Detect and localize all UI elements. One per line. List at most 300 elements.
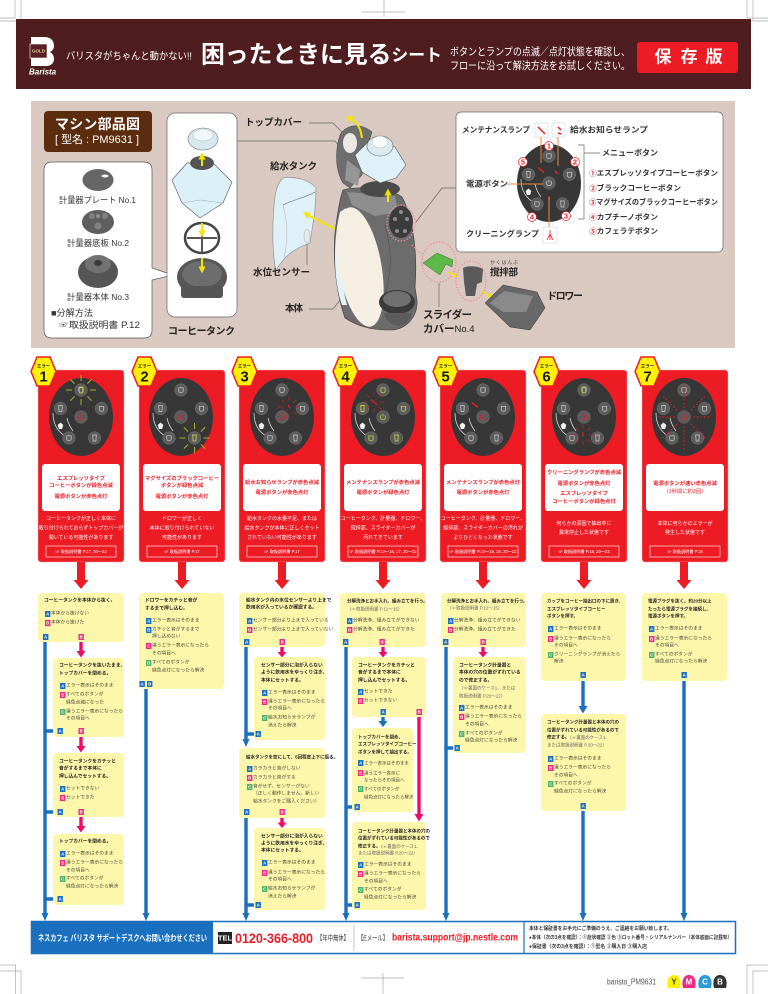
step: clean and assemble: 分解洗浄とお手入れ、組み立てを行う。 <box>347 598 428 604</box>
step: clean and assemble: B <box>348 628 351 632</box>
phone number: 【年中無休】 <box>317 932 349 942</box>
step: clean and assemble: 分解洗浄、組み立てができた <box>454 626 516 632</box>
step: close cover: A <box>59 896 62 902</box>
flow column 7 <box>642 593 727 921</box>
warranty note: ●本体（次の3点を確認）：①症状確認 ②色 ③ロット番号・シリアルナンバー（本体底面に記載有） <box>529 934 732 941</box>
step: unplug: C <box>650 652 653 658</box>
step: clean and assemble: 分解洗浄とお手入れ、組み立てを行う。 <box>447 598 528 604</box>
label: drawer: ドロワー <box>547 290 583 302</box>
error 7 status box: 電源ボタンが速い赤色点滅 <box>653 479 717 487</box>
label: main body: 本体 <box>285 302 303 314</box>
step: refill water: B <box>263 870 266 876</box>
error 7 status box <box>646 464 724 511</box>
error 7 badge <box>635 357 660 386</box>
error card 3 <box>232 357 325 562</box>
error 1 cause: 開いている可能性があります <box>49 534 113 541</box>
error 2 status box: ボタンが緑色点滅 <box>161 481 204 489</box>
step: clean and assemble: 分解洗浄、組み立てができた <box>353 626 415 632</box>
tagline: バリスタがちゃんと動かない!! <box>66 50 192 62</box>
step: correct alignment: コーヒータンク計量器と本体の穴の <box>547 718 619 726</box>
step: correct alignment: C <box>460 732 463 736</box>
step: correct alignment: コーヒータンク計量器と <box>459 662 512 668</box>
flow column 5 <box>441 593 528 921</box>
document code: barista_PM9631 <box>607 978 656 986</box>
error 1 dial <box>49 375 113 456</box>
error 2 status box: マグサイズのブラックコーヒー <box>145 474 219 482</box>
step: correct alignment: C <box>549 782 552 786</box>
error 7 cause: 本体に何らかのエラーが <box>657 520 713 527</box>
error 5 reference <box>448 546 518 557</box>
error 1 cause: 取り付けられておらずトップカバーが <box>39 524 123 532</box>
step: push drawer: するまで押し込む。 <box>145 604 188 612</box>
step: push drawer: カチッと音がするまで <box>152 626 200 632</box>
step: close top cover: 違うエラー表示になったら <box>66 708 123 714</box>
button numbers: 1 <box>547 142 551 150</box>
step: remove tank <box>38 593 124 642</box>
step: set tank: B <box>359 698 362 704</box>
step: reinsert tank: B <box>80 810 83 814</box>
flow column 4 <box>340 593 430 921</box>
error 4 status box <box>344 464 422 511</box>
error 7 cause <box>657 520 713 536</box>
logo: Barista: Barista <box>29 68 57 76</box>
step: brew espresso <box>352 728 417 812</box>
step: shake tank: A <box>248 766 251 772</box>
step: fill water: 本体にセットする。 <box>261 676 304 684</box>
error 5 status box: 電源ボタンが赤色点灯 <box>457 488 510 496</box>
error 3 status box: 電源ボタンが赤色点灯 <box>256 488 309 496</box>
label: menu button: メニューボタン <box>602 148 658 158</box>
step: clean and assemble: （☞取扱説明書 P.12〜15） <box>347 606 402 612</box>
error 2 cause <box>150 515 214 541</box>
arrow: error 5 <box>476 562 490 589</box>
step: shake tank: A <box>245 810 248 814</box>
step: check water level: センサー部分より上まで入っている <box>253 616 329 624</box>
base plate No.2: 計量器底板 No.2 <box>67 238 129 248</box>
footer: support desk <box>31 921 736 954</box>
error 6 badge: 6 <box>542 368 551 386</box>
step: clean and assemble: B <box>381 640 384 644</box>
label: power button: 電源ボタン <box>466 178 508 188</box>
error 5 status box: メンテナンスランプが赤色点灯 <box>446 478 521 486</box>
instruction text <box>450 45 630 72</box>
step: unplug: たったら電源プラグを接続し、 <box>648 606 711 612</box>
step: brew espresso: エスプレッソタイプコーヒー <box>358 740 417 748</box>
base plate No.2 <box>67 210 129 248</box>
error 3 badge: エラー <box>238 364 252 370</box>
keep badge: 保 <box>654 48 672 66</box>
instruction text: フローに沿って解決方法をお試しください。 <box>450 59 630 72</box>
step: remove tank: A <box>44 634 47 640</box>
step: shake tank: 給水タンクを空にして、5回程度上下に振る。 <box>246 754 338 760</box>
step: set tank: A <box>382 710 385 714</box>
error 6 cause <box>556 520 612 536</box>
error 7 reference: ☞ 取扱説明書 P.18 <box>667 548 703 555</box>
step: correct alignment: 緑色点灯になったら解決 <box>554 788 607 794</box>
step: unplug: 違うエラー表示になったら <box>655 634 712 642</box>
error 7 status box: （1秒間に約3回） <box>664 487 706 495</box>
step: check water level: 飲用水が入っているか確認する。 <box>246 604 317 610</box>
control dial <box>517 144 581 222</box>
step: close top cover: その項目へ <box>66 714 90 722</box>
step: push drawer: B <box>148 682 151 686</box>
header band <box>16 19 751 89</box>
error 5 cause: 撹拌部、スライダーカバーの汚れが <box>443 524 523 532</box>
menu button list: ⑤カフェラテボタン <box>589 226 659 236</box>
support label <box>31 921 213 954</box>
step: brew espresso: ボタンを押して抽出する。 <box>358 748 412 756</box>
slider cover illustration <box>412 242 456 307</box>
step: correct alignment: A <box>359 862 362 868</box>
warranty note: ●保証書（次の3点を確認）：①型名 ②購入日 ③購入店 <box>529 943 647 950</box>
step: push drawer: A <box>147 618 150 624</box>
phone number <box>218 930 349 946</box>
error 5 badge <box>433 357 458 386</box>
phone number: TEL <box>218 934 232 942</box>
blue path column 2 <box>142 689 150 921</box>
step: close top cover <box>53 658 125 737</box>
step: check water level: B <box>248 628 251 632</box>
error 4 cause: コーヒータンク、計量器、ドロワー、 <box>341 515 425 522</box>
panel: control panel key <box>416 112 723 252</box>
error 2 cause: ドロワーが正しく <box>162 515 202 522</box>
label: water tank: 給水タンク <box>270 160 317 172</box>
step: remove tank: 本体から抜けた <box>51 618 85 626</box>
icon: cleaning lamp <box>543 227 557 243</box>
step: close top cover: B <box>61 692 64 698</box>
label: slider cover No.4: スライダー <box>423 308 472 321</box>
drawer illustration <box>485 285 545 330</box>
step: brew espresso: なったらその項目へ <box>364 776 405 784</box>
menu button list: ③マグサイズのブラックコーヒーボタン <box>589 196 718 206</box>
step: brew with cup: C <box>549 652 552 658</box>
step: brew with cup: エラー表示はそのまま <box>554 624 602 632</box>
error 1 badge: エラー <box>37 364 51 370</box>
button numbers: 4 <box>530 212 535 222</box>
step: brew with cup: カップをコーヒー抽出口の下に置き、 <box>547 598 623 604</box>
error 6 status box <box>545 464 623 511</box>
step: refill water: センサー部分に泡が入らない <box>261 832 323 840</box>
step: clean and assemble <box>441 593 528 647</box>
step: correct alignment: コーヒータンク計量器と本体の穴の <box>358 828 430 834</box>
error 7 badge: 7 <box>643 368 652 386</box>
error 7 reference <box>650 546 720 557</box>
error card 2 <box>132 357 225 562</box>
step: close cover: B <box>61 860 64 866</box>
keep badge: 版 <box>706 48 722 66</box>
error 3 reference: ☞ 取扱説明書 P.17 <box>264 548 300 555</box>
leader lines <box>237 123 360 309</box>
step: push drawer: ドロワーをカチッと音が <box>145 596 198 604</box>
step: fill water: その項目へ <box>268 704 292 712</box>
error 5 cause: よりひどくなった状態です <box>453 534 513 541</box>
parts title <box>44 111 152 152</box>
step: brew espresso: すべてのボタンが <box>364 786 400 792</box>
step: brew with cup: A <box>582 672 585 678</box>
error 2 reference: ☞ 取扱説明書 P.17 <box>164 548 200 555</box>
step: reinsert tank: 押し込んでセットする。 <box>59 772 111 780</box>
step: push drawer: その項目へ <box>152 650 176 656</box>
error 7 badge: エラー <box>641 364 655 370</box>
step: set tank: 押し込んでセットする。 <box>358 676 410 684</box>
step: correct alignment: または取扱説明書 P.20〜22） <box>547 742 607 748</box>
step: fill water: A <box>263 690 266 696</box>
error 1 status box: コーヒーボタンが緑色点滅 <box>49 481 113 489</box>
error 5 cause <box>441 515 525 541</box>
step: correct alignment: A <box>549 756 552 762</box>
blue path column 6 <box>578 681 588 921</box>
error 4 badge <box>333 357 358 386</box>
step: close top cover: エラー表示はそのまま <box>66 682 114 688</box>
step: brew with cup: クリーニングランプが消えたら <box>554 650 621 658</box>
step: correct alignment: ので修正する。 <box>459 676 492 684</box>
arrow: error 4 <box>376 562 390 589</box>
email: barista.support@jp.nestle.com <box>392 932 518 944</box>
step: refill water: 本体にセットする。 <box>261 846 304 854</box>
panel: machine parts diagram <box>31 101 735 348</box>
error 6 cause: 異常停止した状態です <box>559 529 609 536</box>
step: fill water: センサー部分に泡が入らない <box>261 662 323 668</box>
error 3 cause: 給水タンクが本体に正しくセット <box>244 524 320 532</box>
print color marks: C <box>702 978 708 986</box>
error 6 status box: エスプレッソタイプ <box>560 489 609 497</box>
step: shake tank: カラカラと音がする <box>253 774 296 780</box>
error 1 status box <box>42 464 120 511</box>
step: close cover: C <box>61 876 64 882</box>
error 2 status box: 電源ボタンが赤色点灯 <box>156 492 209 500</box>
flow column 3 <box>239 593 338 921</box>
blue path column 3 <box>242 647 256 921</box>
warranty note: 本体と保証書をお手元にご準備のうえ、ご連絡をお願い致します。 <box>529 925 672 932</box>
step: brew espresso: トップカバーを閉め、 <box>358 734 403 740</box>
step: set tank: セットできた <box>364 688 393 694</box>
machine illustration <box>328 118 417 330</box>
error 3 cause: 給水タンクの水量不足、または <box>247 515 317 522</box>
flow column 6 <box>541 593 626 921</box>
label: cleaning lamp: クリーニングランプ <box>466 228 539 238</box>
step: set tank: コーヒータンクをカチッと <box>358 662 415 668</box>
step: fill water: ように飲用水をゆっくり注ぎ、 <box>261 668 327 676</box>
step: correct alignment: すべてのボタンが <box>554 780 592 786</box>
error 1 badge: 1 <box>39 368 48 386</box>
error 5 badge: エラー <box>439 364 453 370</box>
water tank illustration <box>273 177 335 270</box>
step: brew espresso: C <box>359 786 362 792</box>
step: fill water <box>254 657 327 740</box>
plate No.1: 計量器プレート No.1 <box>59 195 136 205</box>
logo: Barista: GOLD <box>32 48 46 54</box>
step: check water level: センサー部分より上まで入っていない <box>253 626 334 632</box>
arrow: error 2 <box>174 562 190 589</box>
error card 7 <box>635 357 728 562</box>
label: coffee tank: コーヒータンク <box>168 326 235 338</box>
title: 困ったときに見るシート <box>201 42 442 68</box>
step: close cover: トップカバーを閉める。 <box>59 838 111 844</box>
disassembly reference <box>51 307 140 330</box>
menu button list: ④カプチーノボタン <box>589 212 659 222</box>
step: clean and assemble: 分解洗浄、組み立てができない <box>454 616 521 624</box>
step: correct alignment: 修正する。（☞裏面のケース1、 <box>547 734 610 740</box>
error 1 badge <box>31 357 56 386</box>
error 2 cause: 可能性があります <box>162 534 202 541</box>
step: brew espresso: A <box>359 760 362 766</box>
label: stirrer: 撹拌部 <box>490 266 518 278</box>
error card 4 <box>333 357 426 562</box>
step: check water level <box>239 593 334 647</box>
step: correct alignment: エラー表示はそのまま <box>465 704 513 710</box>
pink arrow column 5 <box>478 647 487 658</box>
step: set tank: A <box>359 690 362 694</box>
warranty note <box>529 925 732 950</box>
step: brew espresso: 違うエラー表示に <box>364 770 400 776</box>
step: brew espresso: B <box>359 770 362 776</box>
step: correct alignment: B <box>359 872 362 876</box>
step: correct alignment: 違うエラー表示になったら <box>364 870 421 876</box>
step: unplug: エラー表示はそのまま <box>655 624 703 632</box>
label: water notice lamp: 給水お知らせランプ <box>570 124 648 134</box>
step: correct alignment: A <box>456 746 459 750</box>
step: set tank: セットできない <box>364 696 398 704</box>
step: push drawer: C <box>147 644 150 648</box>
error 3 status box: 給水お知らせランプが赤色点滅 <box>245 478 320 486</box>
step: reinsert tank: A <box>61 786 64 792</box>
step: correct alignment: A <box>582 804 585 808</box>
step: fill water: A <box>257 732 260 736</box>
error 1 status box: エスプレッソタイプ <box>57 474 106 482</box>
error 1 cause <box>39 515 123 541</box>
step: close top cover: C <box>61 710 64 714</box>
step: refill water: A <box>263 860 266 866</box>
error 2 cause: 本体に取り付けられていない <box>150 524 214 532</box>
phone number: 0120-366-800 <box>235 930 313 946</box>
step: close cover <box>53 834 124 905</box>
step: correct alignment: すべてのボタンが <box>364 886 402 892</box>
error 4 status box: 電源ボタンが緑色点灯 <box>357 488 410 496</box>
error 4 badge: エラー <box>339 364 353 370</box>
button numbers: 3 <box>564 212 568 220</box>
label: slider cover No.4 <box>423 308 475 335</box>
error 5 cause: コーヒータンク、計量器、ドロワー、 <box>441 515 525 522</box>
step: correct alignment: すべてのボタンが <box>465 730 503 736</box>
step: unplug: A <box>683 672 686 678</box>
print color marks: M <box>686 978 693 986</box>
step: close top cover: A <box>59 728 62 734</box>
error 6 badge: エラー <box>540 364 554 370</box>
step: clean and assemble: （☞取扱説明書 P.12〜15） <box>447 604 502 612</box>
step: close top cover: すべてのボタンが <box>66 690 104 698</box>
support label: ネスカフェ バリスタ サポートデスクへお問い合わせください <box>38 933 207 943</box>
pink arrows column 1 <box>77 642 86 832</box>
step: push drawer: 緑色点灯になったら解決 <box>152 666 205 674</box>
step: fill water: C <box>263 716 266 720</box>
step: close cover: 違うエラー表示になったら <box>66 858 123 866</box>
pink arrows column 3 <box>277 647 286 828</box>
step: shake tank: （正しく動作しません。新しい <box>253 790 320 796</box>
step: reinsert tank: 音がするまで本体に <box>59 764 102 772</box>
error 3 cause <box>244 515 320 541</box>
step: reinsert tank: A <box>59 810 62 814</box>
step: refill water: A <box>257 902 260 908</box>
error 4 badge: 4 <box>341 368 350 386</box>
step: brew with cup: エスプレッソタイプコーヒー <box>547 606 606 612</box>
error 6 reference <box>549 546 619 557</box>
email <box>358 932 518 944</box>
step: correct alignment: エラー表示はそのまま <box>364 860 412 868</box>
error card 5 <box>433 357 526 562</box>
error 5 dial <box>451 378 515 456</box>
step: close top cover: トップカバーを閉める。 <box>59 670 111 676</box>
step: remove tank: コーヒータンクを本体から抜く。 <box>44 596 115 604</box>
step: unplug: B <box>650 636 653 642</box>
step: unplug: A <box>650 626 653 632</box>
step: refill water: C <box>263 886 266 892</box>
step: brew espresso: A <box>356 804 359 810</box>
step: brew with cup: ボタンを押す。 <box>547 612 578 620</box>
step: fill water: 違うエラー表示になったら <box>268 698 325 704</box>
step: remove tank: A <box>46 612 49 616</box>
step: refill water: 給水お知らせランプが <box>268 884 316 892</box>
step: refill water: その項目へ <box>268 876 292 882</box>
step: shake tank: カラカラと音がしない <box>253 764 301 772</box>
error 5 badge: 5 <box>441 368 450 386</box>
step: close top cover: A <box>61 684 64 688</box>
arrow: error 1 <box>74 562 88 589</box>
error 6 status box: 電源ボタンが赤色点灯 <box>558 479 611 487</box>
step: set tank: B <box>418 710 421 714</box>
step: set tank <box>352 657 426 717</box>
error 4 cause: 汚れてきています <box>363 534 403 541</box>
blue path column 5 <box>442 647 455 921</box>
menu bracket <box>578 145 600 219</box>
step: refill water: ように飲用水をゆっくり注ぎ、 <box>261 840 327 846</box>
step: close top cover: B <box>80 728 83 734</box>
step: shake tank: C <box>248 784 251 790</box>
step: shake tank: 音がせず、センサーがない <box>253 782 310 790</box>
email: 【Eメール】 <box>358 934 388 942</box>
step: set tank: 音がするまで本体に <box>358 668 401 676</box>
step: correct alignment: 本体の穴の位置がずれている <box>459 668 521 676</box>
step: close cover: 緑色点灯になったら解決 <box>66 882 119 890</box>
step: push drawer <box>139 593 224 689</box>
plate No.1 <box>59 169 136 205</box>
step: shake tank: B <box>281 810 284 814</box>
body No.3: 計量器本体 No.3 <box>67 292 129 302</box>
step: refill water: エラー表示はそのまま <box>268 858 316 866</box>
step: push drawer: B <box>147 628 150 632</box>
step: correct alignment: 緑色点灯になったら解決 <box>364 894 417 900</box>
error 7 dial <box>652 378 716 456</box>
error 2 reference <box>147 546 217 557</box>
error 4 cause <box>341 515 425 541</box>
step: correct alignment: 取扱説明書 P.20〜22） <box>459 692 505 700</box>
label: slider cover No.4: カバーNo.4 <box>423 323 475 335</box>
step: shake tank: 給水タンクをご購入ください） <box>253 798 320 804</box>
error 5 reference: ☞ 取扱説明書 P.12〜15, 18, 20〜22 <box>449 548 517 555</box>
step: correct alignment: 位置がずれている可能性があるので <box>358 834 430 842</box>
step: brew espresso: エラー表示はそのまま <box>364 760 409 766</box>
step: push drawer: 押し込めない <box>152 632 181 640</box>
step: reinsert tank: セットできた <box>66 794 95 800</box>
step: correct alignment: 違うエラー表示になったら <box>465 712 522 720</box>
error 2 dial <box>149 378 213 456</box>
step: unplug: 緑色点灯になったら解決 <box>655 658 708 664</box>
callout: measuring parts <box>44 162 173 338</box>
step: correct alignment: B <box>549 766 552 770</box>
blue path column 7 <box>680 681 688 921</box>
step: fill water: 消えたら解決 <box>268 722 297 728</box>
error 1 cause: コーヒータンクが正しく本体に <box>46 515 116 522</box>
step: fill water: 給水お知らせランプが <box>268 714 316 720</box>
